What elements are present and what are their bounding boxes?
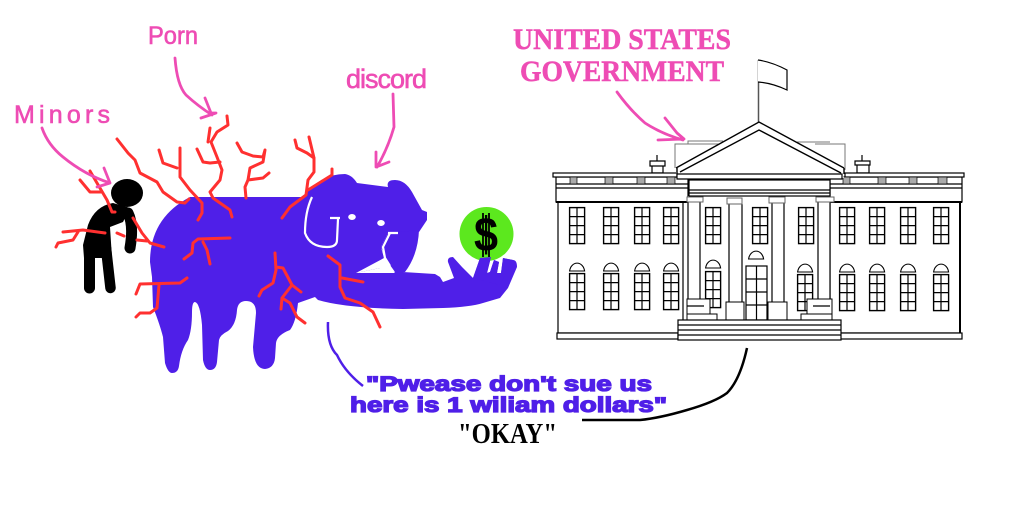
red cracks: [56, 116, 380, 327]
columns: [687, 197, 834, 320]
quote: elephant: here is 1 wiliam dollars": [350, 394, 667, 417]
White House building: [553, 60, 964, 340]
elephant body: [150, 174, 517, 373]
arrow: government to building: [617, 92, 684, 140]
flag: [758, 60, 787, 122]
connector: elephant to quote: [328, 322, 363, 386]
label: Porn: Porn: [148, 22, 198, 50]
roof behind pediment: [675, 141, 845, 170]
heading: United States Government: GOVERNMENT: [520, 55, 724, 88]
label: Minors: Minors: [14, 101, 110, 129]
left wing: [553, 173, 688, 339]
front door: [746, 266, 767, 320]
arrow: discord to elephant: [376, 94, 394, 167]
pediment: [676, 122, 844, 179]
arrow: Porn to cracks: [175, 58, 216, 118]
ear and trunk outlines: [305, 197, 398, 266]
quote: elephant: "Pwease don't sue us: [366, 373, 652, 396]
front steps: [678, 320, 841, 340]
portico: [676, 122, 844, 320]
quote: elephant: [350, 373, 667, 417]
chimneys: [650, 155, 870, 173]
dollar coin: $: [474, 209, 498, 262]
heading: United States Government: UNITED STATES: [513, 23, 731, 56]
entablature: [689, 180, 830, 196]
person silhouette: [83, 179, 143, 288]
right wing: [830, 173, 964, 339]
label: discord: discord: [346, 64, 427, 94]
arrow: Minors to person: [42, 128, 110, 187]
connector: building to reply: [582, 348, 747, 420]
dollar coin: [460, 207, 514, 285]
reply: OKAY: "OKAY": [458, 418, 557, 450]
heading: United States Government: [513, 23, 731, 88]
